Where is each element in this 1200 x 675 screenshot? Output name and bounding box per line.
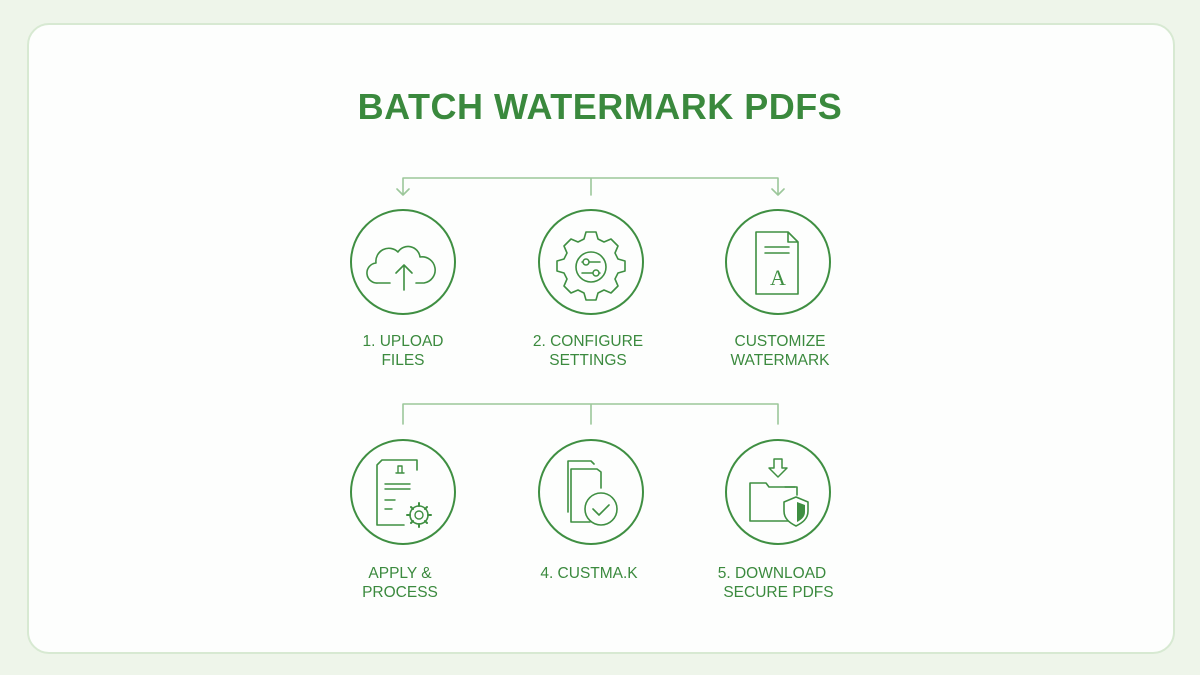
label: download: SECURE PDFS (723, 584, 834, 601)
label: configure: SETTINGS (549, 352, 627, 369)
label: upload: FILES (381, 352, 425, 369)
icon: documents check (539, 440, 643, 544)
label: configure (533, 333, 643, 369)
icon: upload cloud (351, 210, 455, 314)
label: custmark: 4. CUSTMA.K (540, 565, 638, 582)
label: customize: CUSTOMIZE (734, 333, 826, 350)
label: upload: 1. UPLOAD (362, 333, 443, 350)
label: configure: 2. CONFIGURE (533, 333, 643, 350)
icon: watermark document: A (770, 265, 786, 290)
label: upload (362, 333, 443, 369)
connector: top (397, 178, 784, 195)
icon: download secure folder (726, 440, 830, 544)
label: apply: PROCESS (362, 584, 438, 601)
label: download: 5. DOWNLOAD (718, 565, 826, 582)
title: BATCH WATERMARK PDFS (358, 86, 842, 127)
label: customize (730, 333, 830, 369)
icon: gear settings (539, 210, 643, 314)
connector: bottom (403, 404, 778, 424)
label: customize: WATERMARK (730, 352, 830, 369)
label: download (718, 565, 834, 601)
icon: apply & process (351, 440, 455, 544)
icon: watermark document (726, 210, 830, 314)
label: apply: APPLY & (368, 565, 432, 582)
label: apply (362, 565, 438, 601)
